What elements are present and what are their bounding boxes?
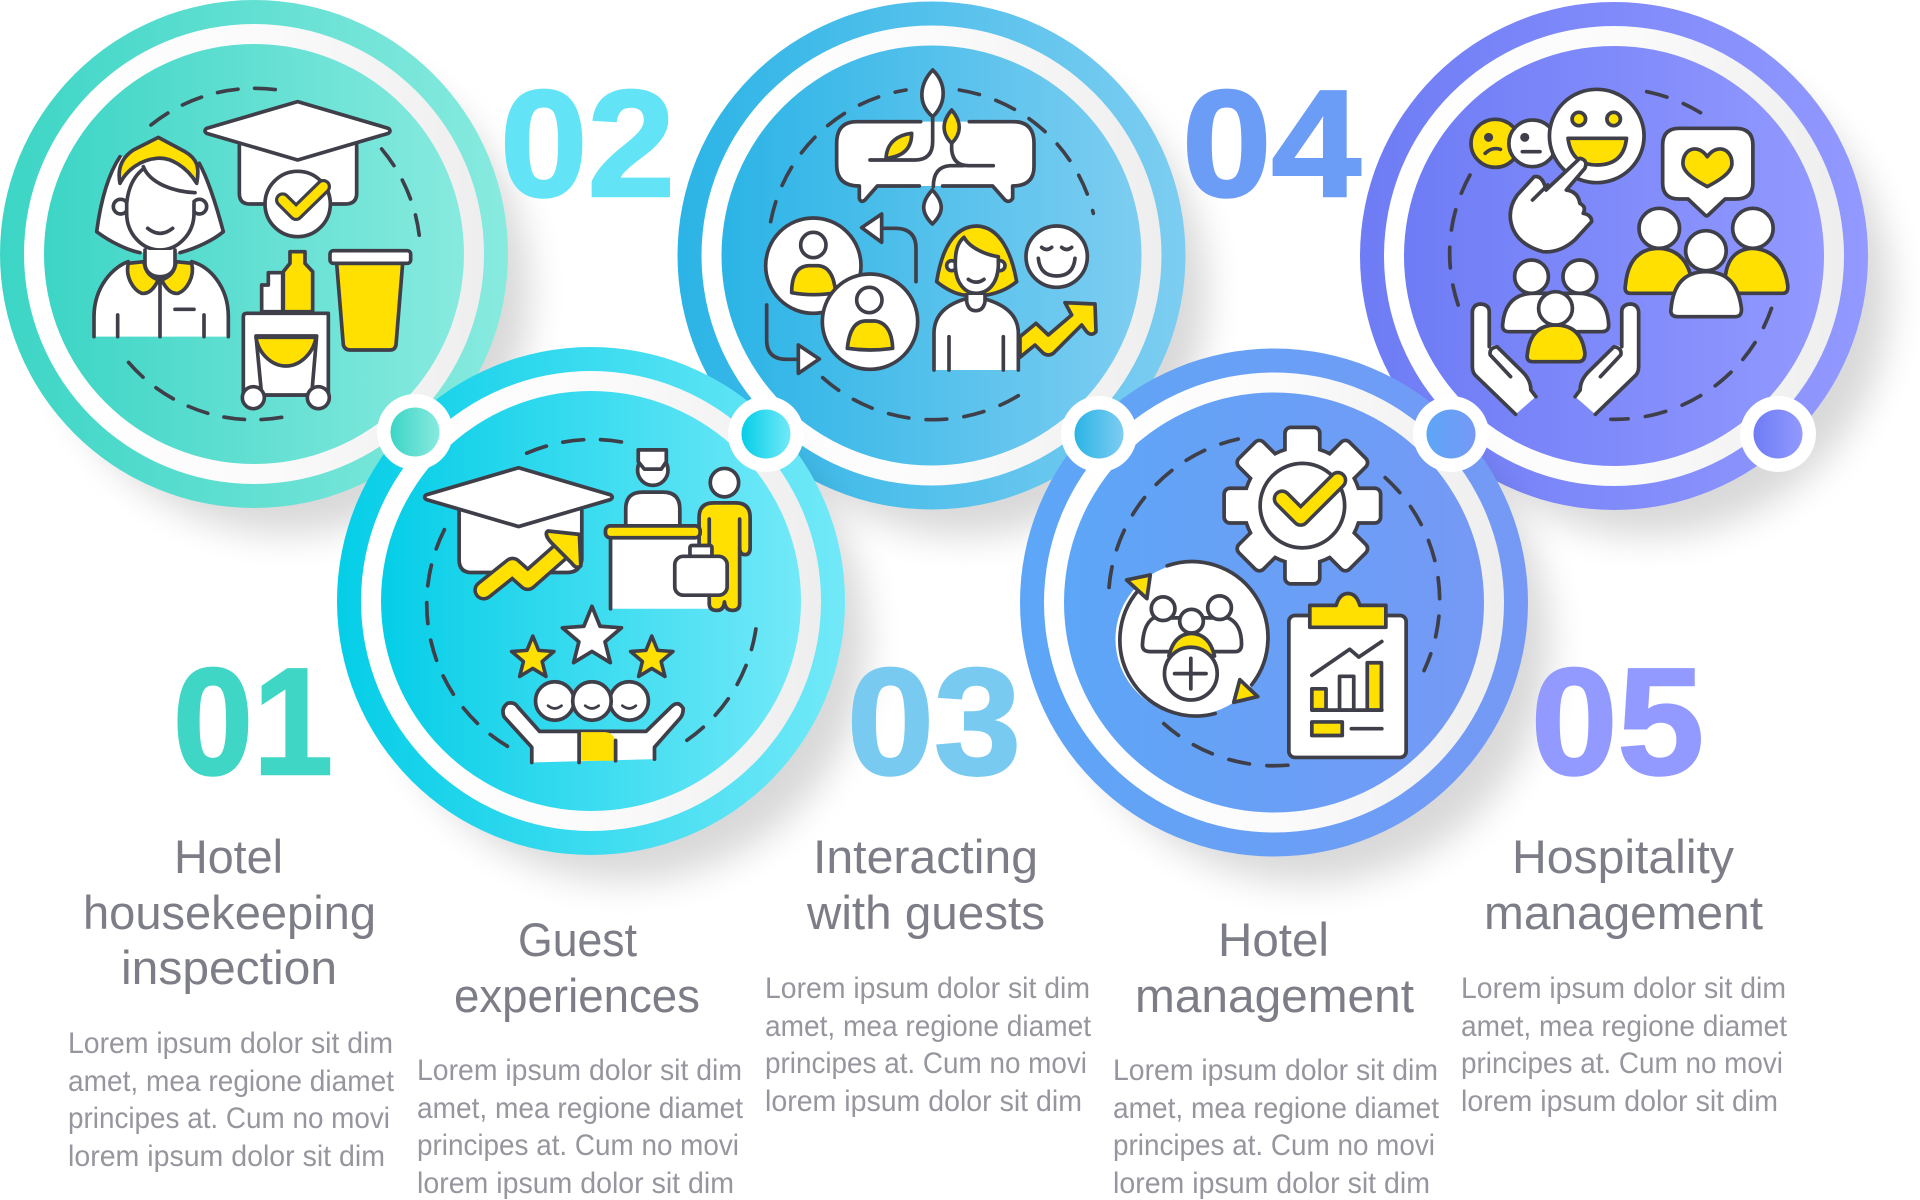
text block: step 4: Lorem ipsum dolor sit dim [1113,1054,1438,1087]
text block: step 5: management [1484,886,1763,939]
text block: step 5 [1461,830,1788,1118]
icon: gear check, team recruitment, clipboard chart [1109,429,1440,766]
text block: step 4: lorem ipsum dolor sit dim [1113,1167,1430,1200]
text block: step 4: principes at. Cum no movi [1113,1129,1435,1162]
text block: step 1: lorem ipsum dolor sit dim [68,1140,385,1173]
text block: step 5: Lorem ipsum dolor sit dim [1461,972,1786,1005]
text block: step 3 [765,830,1092,1118]
text block: step 4: management [1135,969,1414,1022]
text block: step 2 [417,913,744,1200]
text block: step 3: Interacting [813,830,1038,883]
text block: step 1: inspection [121,941,337,994]
text block: step 2: amet, mea regione diamet [417,1092,744,1125]
text block: step 2: Guest [518,913,637,966]
connector dots [377,394,1816,472]
text block: step 1: housekeeping [83,886,376,939]
text block: step 3: with guests [806,886,1045,939]
panel: step 5 circle [1360,2,1890,536]
text block: step 3: lorem ipsum dolor sit dim [765,1085,1082,1118]
text block: step 5: amet, mea regione diamet [1461,1010,1788,1043]
number 05: 05 [1531,637,1704,807]
panel: step 4 circle [1020,348,1550,883]
icon: housekeeper, graduation cap, cleaning cart [94,88,419,420]
panel: step 1 circle [0,0,530,534]
text block: step 4: amet, mea regione diamet [1113,1092,1440,1125]
text block: step 2: experiences [454,969,700,1022]
number 02: 02 [500,59,675,229]
panel: step 2 circle [337,347,867,881]
text block: step 2: Lorem ipsum dolor sit dim [417,1054,742,1087]
number 01: 01 [173,637,333,807]
text block: step 1 [68,830,395,1173]
text block: step 3: amet, mea regione diamet [765,1010,1092,1043]
text block: step 5: lorem ipsum dolor sit dim [1461,1085,1778,1118]
icon: dialogue, guests, satisfied employee [766,70,1096,420]
text block: step 4: Hotel [1218,913,1329,966]
text block: step 2: principes at. Cum no movi [417,1129,739,1162]
text block: step 1: Hotel [174,830,283,883]
text block: step 1: Lorem ipsum dolor sit dim [68,1027,393,1060]
icon: training cap, reception desk, star ratings [425,439,756,762]
number 04: 04 [1182,59,1361,229]
text block: step 5: principes at. Cum no movi [1461,1047,1783,1080]
text block: step 4 [1113,913,1440,1200]
text block: step 3: Lorem ipsum dolor sit dim [765,972,1090,1005]
text block: step 1: principes at. Cum no movi [68,1102,390,1135]
text block: step 2: lorem ipsum dolor sit dim [417,1167,734,1200]
icon: feedback faces, team with heart, care hands [1450,89,1788,419]
text block: step 1: amet, mea regione diamet [68,1065,395,1098]
panel: step 3 circle [678,2,1207,536]
text block: step 5: Hospitality [1512,830,1735,883]
text block: step 3: principes at. Cum no movi [765,1047,1087,1080]
number 03: 03 [847,637,1021,807]
